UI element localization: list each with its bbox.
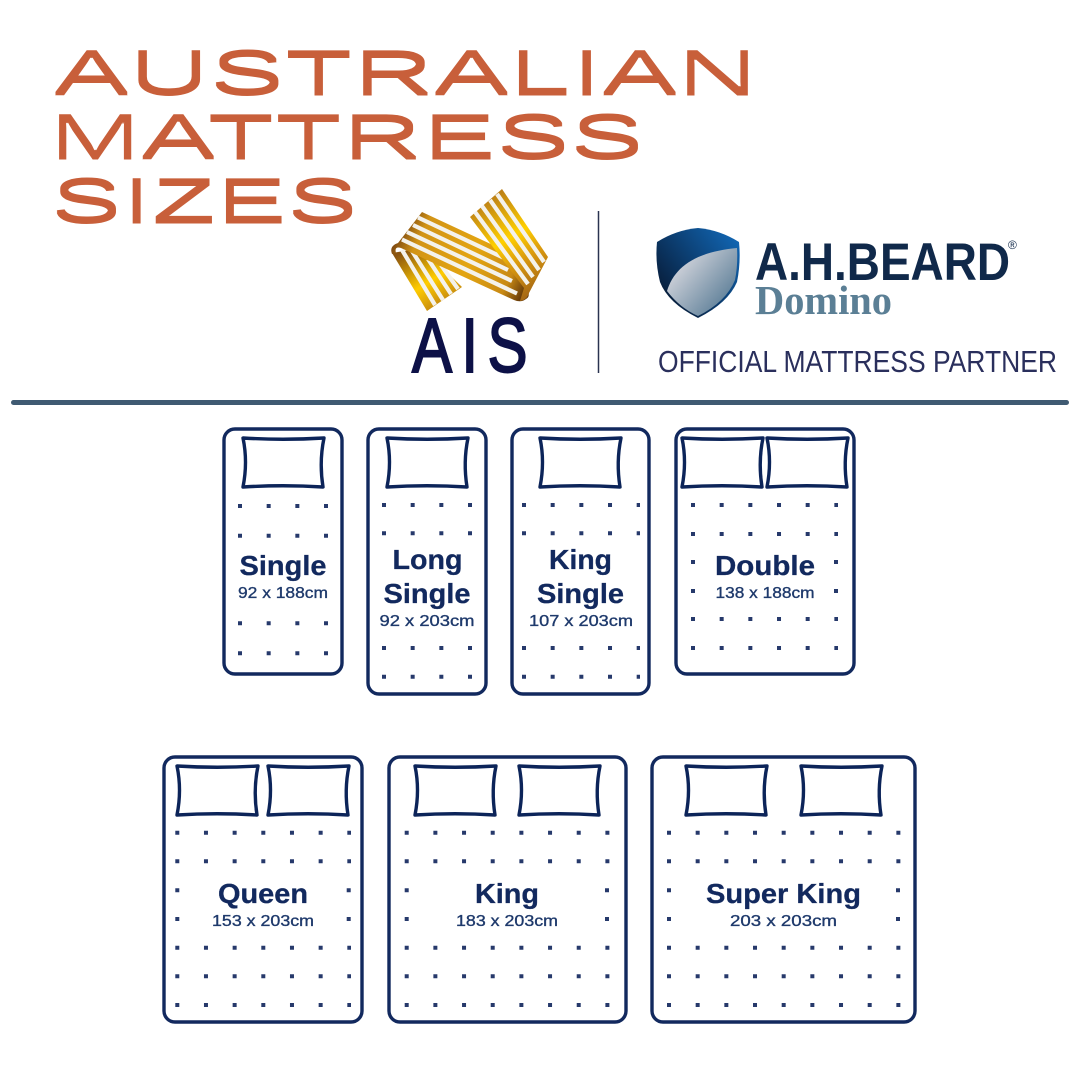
logo divider — [598, 211, 600, 373]
panel: Single: 92 x 188cm — [238, 585, 328, 602]
title: MATTRESS — [49, 103, 644, 171]
panel: King Single — [512, 429, 649, 694]
panel: King — [389, 757, 626, 1022]
panel: Single — [224, 429, 342, 674]
panel: Long Single: Long — [392, 544, 462, 575]
panel: Queen — [164, 757, 362, 1022]
title: SIZES — [51, 167, 358, 235]
panel: King Single: 107 x 203cm — [529, 613, 633, 630]
panel: Double: Double — [715, 550, 815, 581]
panel: Double — [676, 429, 854, 674]
panel: Single: Single — [240, 550, 326, 581]
title: AUSTRALIAN — [54, 39, 758, 107]
sub-brand: Domino — [755, 277, 892, 323]
panel: King: 183 x 203cm — [456, 913, 558, 930]
panel: King Single: King — [549, 544, 612, 575]
icon: AIS ribbon — [391, 189, 548, 311]
AIS wordmark: AIS — [412, 302, 537, 389]
panel: Long Single: 92 x 203cm — [380, 613, 474, 630]
panel: Long Single: Single — [384, 578, 470, 609]
panel: Queen: 153 x 203cm — [212, 913, 314, 930]
panel: King Single: Single — [537, 578, 624, 609]
panel: Super King — [652, 757, 915, 1022]
panel: Double: 138 x 188cm — [716, 585, 814, 602]
logo: AIS — [391, 189, 548, 389]
panel: King: King — [475, 878, 539, 909]
divider — [11, 400, 1069, 405]
title — [49, 39, 758, 235]
logo: A.H. Beard Domino — [656, 228, 1057, 379]
panel: Long Single — [368, 429, 486, 694]
panel: Queen: Queen — [218, 878, 308, 909]
panel: Super King: 203 x 203cm — [730, 913, 837, 930]
panel: Super King: Super King — [706, 878, 861, 909]
icon: shield — [656, 228, 740, 318]
brand name: A.H.BEARD — [755, 233, 1010, 292]
registered mark: ® — [1008, 238, 1017, 252]
